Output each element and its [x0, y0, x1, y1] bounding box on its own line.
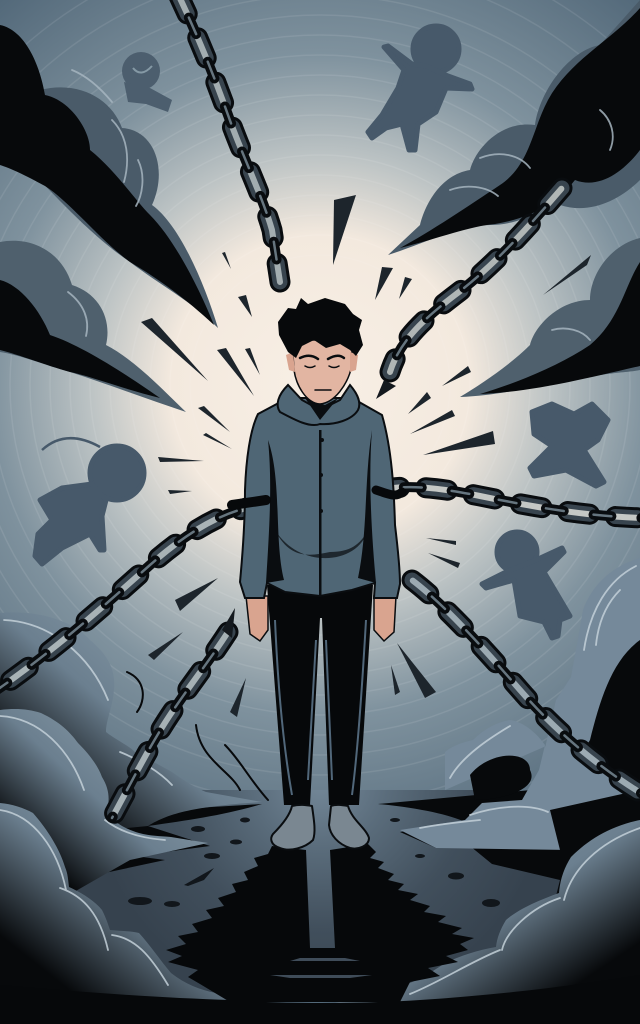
hands — [246, 596, 396, 641]
chain: right arm — [378, 487, 640, 518]
hair — [278, 298, 363, 358]
hood — [278, 385, 359, 425]
cloud: top left dark storm — [0, 25, 218, 328]
chain wrapped on arm: right — [376, 490, 402, 495]
shoes — [271, 805, 369, 850]
ground edge black jagged pools — [0, 780, 640, 960]
silhouette: child top right — [368, 26, 472, 150]
chain wrapped on arm: left — [232, 500, 266, 505]
hoodie shadows and seams — [266, 430, 376, 595]
ground — [60, 790, 590, 1000]
cloud: lower right front — [335, 820, 640, 1024]
shadow light stripes — [270, 958, 372, 978]
neck and chest shadow — [305, 398, 338, 420]
cloud: top right dark storm — [388, 0, 640, 255]
ground debris stones — [128, 818, 500, 907]
cloud: lower right big back — [540, 558, 640, 830]
chain: lower left — [112, 632, 228, 818]
broken chain spikes — [222, 380, 396, 638]
chain: left arm — [0, 505, 262, 692]
face details — [300, 356, 344, 390]
chain: upper right — [390, 188, 562, 372]
face — [292, 340, 352, 404]
hoodie sleeves and torso — [240, 398, 400, 598]
cloud: left middle — [0, 241, 186, 412]
boy — [240, 298, 400, 850]
chain: lower right — [412, 580, 640, 795]
cloud: lower right middle — [400, 720, 640, 850]
cloud: lower left front — [0, 803, 280, 1024]
silhouette: figure right — [530, 404, 608, 486]
boy's ground shadow — [166, 844, 474, 1002]
silhouette: child left — [35, 438, 144, 564]
cloud: right middle — [460, 238, 640, 397]
legs: black jeans — [267, 585, 373, 805]
silhouette: small child top left — [122, 52, 172, 112]
flying shards — [141, 195, 591, 717]
bottom black vignette — [0, 975, 640, 1024]
ears — [286, 352, 358, 372]
cloud: lower left middle — [0, 709, 208, 900]
cloud: lower left back — [0, 612, 268, 840]
chain: top hanging — [178, 0, 280, 282]
silhouette: child lower right — [482, 532, 570, 638]
